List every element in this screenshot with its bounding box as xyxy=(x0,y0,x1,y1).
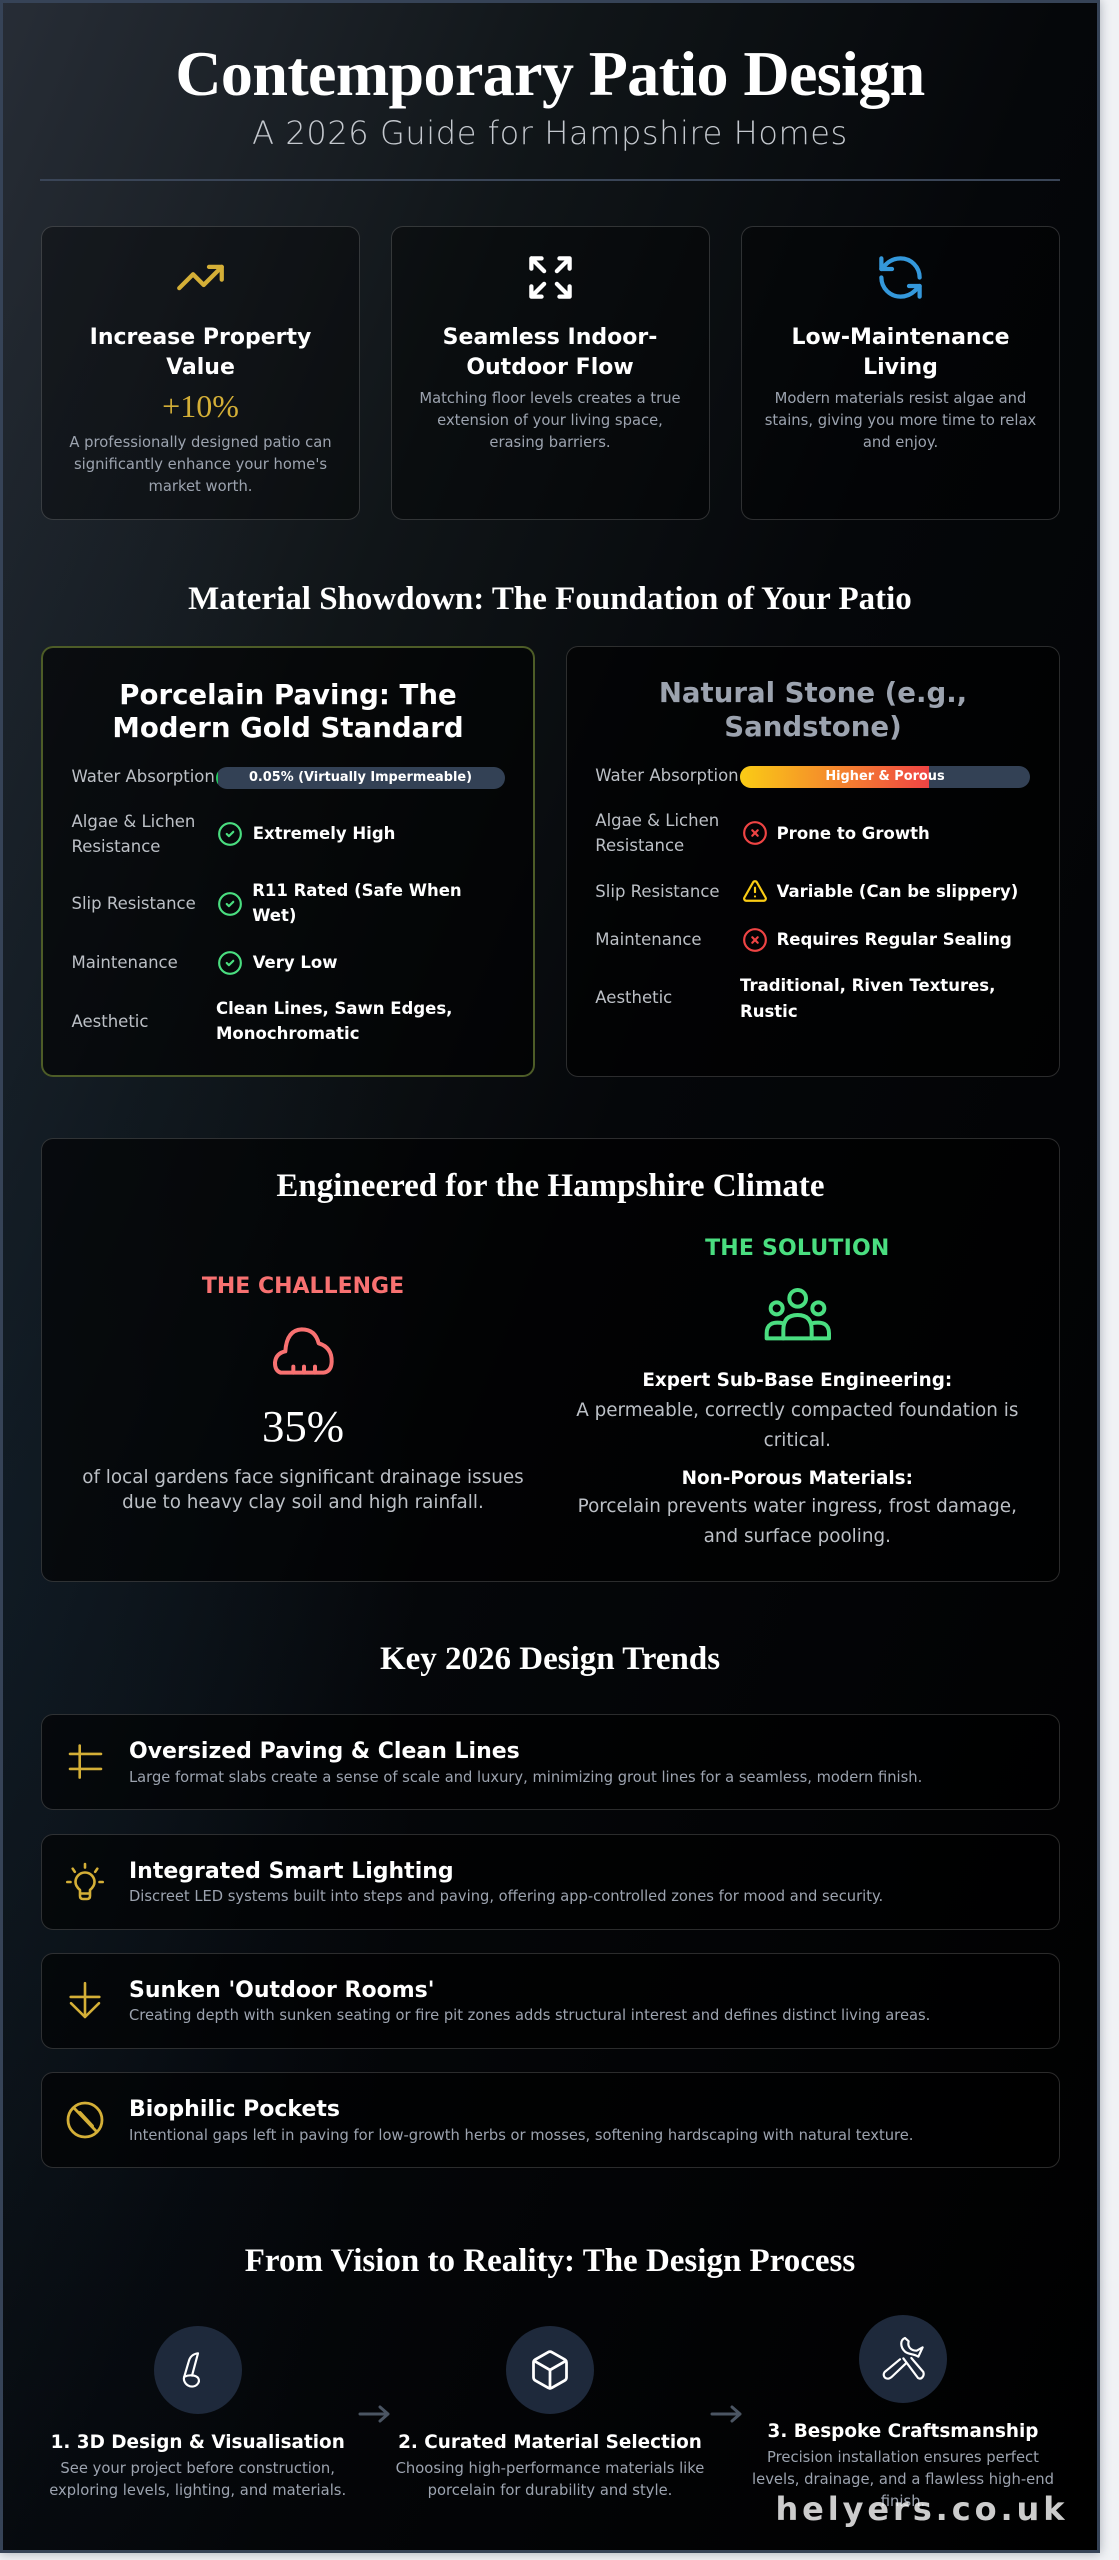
natural stone heading: Sandstone) xyxy=(724,710,902,743)
porcelain heading: Modern Gold Standard xyxy=(112,711,464,744)
solution point 2 text: and surface pooling. xyxy=(704,1526,891,1547)
step text: exploring levels, lighting, and materials. xyxy=(49,2482,346,2499)
solution point 1 heading: Expert Sub-Base Engineering: xyxy=(642,1370,952,1391)
slip value: R11 Rated (Safe When xyxy=(252,881,462,900)
slip value: Variable (Can be slippery) xyxy=(777,882,1018,900)
row: water absorption: Water Absorption xyxy=(595,766,739,785)
panel: trend biophilic pockets xyxy=(41,2072,1060,2168)
aesthetic value xyxy=(216,998,452,1043)
process step 2 xyxy=(396,2326,704,2499)
description xyxy=(765,390,1036,451)
step text xyxy=(396,2460,704,2499)
heading: design trends: Key 2026 Design Trends xyxy=(380,1641,720,1677)
slip value xyxy=(252,881,462,925)
challenge text: due to heavy clay soil and high rainfall. xyxy=(122,1492,484,1513)
solution point 2 text: Porcelain prevents water ingress, frost damage, xyxy=(578,1496,1017,1517)
icon: light bulb xyxy=(66,1862,104,1900)
algae value: Prone to Growth xyxy=(777,824,930,842)
panel: trend outdoor rooms xyxy=(41,1953,1060,2049)
solution point 2 heading: Non-Porous Materials: xyxy=(682,1468,913,1488)
arrow xyxy=(358,2405,390,2423)
process step 3 xyxy=(752,2315,1054,2510)
maintenance value: Requires Regular Sealing xyxy=(777,930,1012,948)
step text xyxy=(49,2460,346,2499)
panel: porcelain paving xyxy=(41,646,535,1077)
description xyxy=(69,434,332,494)
description: stains, giving you more time to relax xyxy=(765,412,1036,429)
row: water absorption: Water Absorption xyxy=(72,767,215,786)
row: algae label xyxy=(72,812,195,856)
trend text: Creating depth with sunken seating or fire pit zones adds structural interest and defines distinct living areas. xyxy=(129,2007,930,2024)
heading xyxy=(443,324,657,380)
process step 1 xyxy=(49,2326,346,2499)
solution point 1 text: critical. xyxy=(764,1430,831,1450)
heading: Low-Maintenance xyxy=(791,324,1010,350)
the challenge label: THE CHALLENGE xyxy=(202,1274,404,1299)
row: algae label: Algae & Lichen xyxy=(595,811,719,830)
porcelain heading xyxy=(112,678,464,744)
description: A professionally designed patio can xyxy=(69,434,332,450)
step heading: 3. Bespoke Craftsmanship xyxy=(768,2421,1038,2442)
bar: water absorption: Higher & Porous xyxy=(825,768,945,784)
trend title: Integrated Smart Lighting xyxy=(129,1859,454,1884)
step text: levels, drainage, and a flawless high-end xyxy=(752,2471,1054,2488)
trend title: Biophilic Pockets xyxy=(129,2097,340,2122)
icon: check xyxy=(218,892,242,916)
row: maintenance label: Maintenance xyxy=(595,930,702,948)
icon: refresh xyxy=(879,256,922,299)
aesthetic value: Monochromatic xyxy=(216,1024,360,1043)
description: significantly enhance your home's xyxy=(74,456,327,472)
natural stone heading: Natural Stone (e.g., xyxy=(659,676,967,709)
arrow xyxy=(710,2405,742,2423)
challenge text xyxy=(82,1466,524,1513)
step text: porcelain for durability and style. xyxy=(428,2482,672,2499)
bar: water absorption xyxy=(740,766,1030,788)
description: Modern materials resist algae and xyxy=(775,390,1026,407)
description: extension of your living space, xyxy=(437,412,663,429)
description: market worth. xyxy=(148,478,252,494)
row: aesthetic label: Aesthetic xyxy=(72,1012,148,1031)
step text: See your project before construction, xyxy=(60,2460,335,2477)
panel: trend oversized paving xyxy=(41,1714,1060,1810)
row: algae label: Resistance xyxy=(72,837,160,856)
heading xyxy=(90,324,311,380)
icon: check xyxy=(218,822,242,846)
aesthetic value xyxy=(740,976,995,1021)
climate heading: Engineered for the Hampshire Climate xyxy=(276,1168,825,1204)
icon: expand xyxy=(529,256,572,299)
icon: box in circle xyxy=(506,2326,594,2414)
natural stone heading xyxy=(659,676,967,743)
aesthetic value: Rustic xyxy=(740,1002,798,1021)
aesthetic value: Clean Lines, Sawn Edges, xyxy=(216,998,452,1018)
row: slip label: Slip Resistance xyxy=(595,882,720,900)
trend text: Large format slabs create a sense of scale and luxury, minimizing grout lines for a seamless, modern finish. xyxy=(129,1769,922,1786)
step text xyxy=(752,2449,1054,2510)
aesthetic value: Traditional, Riven Textures, xyxy=(740,976,995,995)
watermark: helyers.co.uk xyxy=(776,2490,1068,2528)
subtitle: A 2026 Guide for Hampshire Homes xyxy=(252,114,848,152)
heading: Outdoor Flow xyxy=(466,354,634,380)
heading xyxy=(791,324,1010,380)
panel: climate xyxy=(41,1138,1060,1582)
trend title: Oversized Paving & Clean Lines xyxy=(129,1739,520,1764)
the solution label: THE SOLUTION xyxy=(705,1236,890,1260)
icon: paving lines xyxy=(68,1744,102,1779)
panel: trend smart lighting xyxy=(41,1834,1060,1930)
description: and enjoy. xyxy=(863,434,938,451)
step heading: 2. Curated Material Selection xyxy=(398,2432,702,2453)
description xyxy=(419,390,681,451)
heading: material showdown: Material Showdown: The Foundation of Your Patio xyxy=(188,580,912,616)
heading: Increase Property xyxy=(90,324,311,350)
solution point 1 text xyxy=(576,1400,1018,1450)
icon: brush in circle xyxy=(154,2326,242,2414)
panel: natural stone xyxy=(566,646,1060,1077)
maintenance value: Very Low xyxy=(253,953,337,972)
step text: Choosing high-performance materials like xyxy=(396,2460,704,2477)
panel: seamless indoor-outdoor flow xyxy=(390,226,710,520)
title: Contemporary Patio Design xyxy=(175,38,925,109)
heading: design process: From Vision to Reality: The Design Process xyxy=(245,2243,855,2279)
row: algae label xyxy=(595,811,719,855)
icon: cross xyxy=(743,821,767,845)
description: erasing barriers. xyxy=(489,434,611,451)
icon: no-sign pocket xyxy=(66,2102,104,2138)
solution point 1 text: A permeable, correctly compacted foundation is xyxy=(576,1400,1018,1421)
step text: finish. xyxy=(881,2493,925,2510)
row: slip label: Slip Resistance xyxy=(72,894,196,913)
step text: Precision installation ensures perfect xyxy=(767,2449,1039,2466)
trend text: Discreet LED systems built into steps and paving, offering app-controlled zones for mood and security. xyxy=(129,1888,883,1905)
step heading: 1. 3D Design & Visualisation xyxy=(51,2432,345,2453)
icon: cross xyxy=(743,928,767,952)
icon: trending up xyxy=(177,264,224,290)
icon: sunken arrow xyxy=(69,1982,101,2018)
trend title: Sunken 'Outdoor Rooms' xyxy=(129,1978,434,2003)
icon: cloud xyxy=(273,1327,334,1375)
bar: water absorption: 0.05% (Virtually Impermeable) xyxy=(249,770,472,784)
heading: Seamless Indoor- xyxy=(443,324,657,350)
porcelain heading: Porcelain Paving: The xyxy=(119,678,457,710)
slip value: Wet) xyxy=(252,906,296,925)
row: algae label: Resistance xyxy=(595,836,684,855)
row: algae label: Algae & Lichen xyxy=(72,812,195,831)
heading: Value xyxy=(166,354,235,380)
row: maintenance label: Maintenance xyxy=(72,953,178,972)
solution point 2 text xyxy=(578,1496,1017,1547)
challenge text: of local gardens face significant drainage issues xyxy=(82,1466,524,1488)
icon: warning xyxy=(743,880,767,902)
icon: group xyxy=(764,1288,831,1340)
icon: check xyxy=(218,951,242,975)
panel: increase property value xyxy=(41,226,360,520)
trend text: Intentional gaps left in paving for low-growth herbs or mosses, softening hardscaping with natural texture. xyxy=(129,2127,913,2144)
heading: Living xyxy=(863,354,938,380)
bar: water absorption xyxy=(216,766,505,788)
panel: low-maintenance living xyxy=(741,226,1060,520)
stat: +10%: +10% xyxy=(162,388,239,424)
icon: tools in circle xyxy=(859,2315,947,2403)
row: aesthetic label: Aesthetic xyxy=(595,988,672,1007)
algae value: Extremely High xyxy=(253,824,395,843)
stat: 35%: 35% xyxy=(262,1400,344,1450)
description: Matching floor levels creates a true xyxy=(419,390,681,407)
